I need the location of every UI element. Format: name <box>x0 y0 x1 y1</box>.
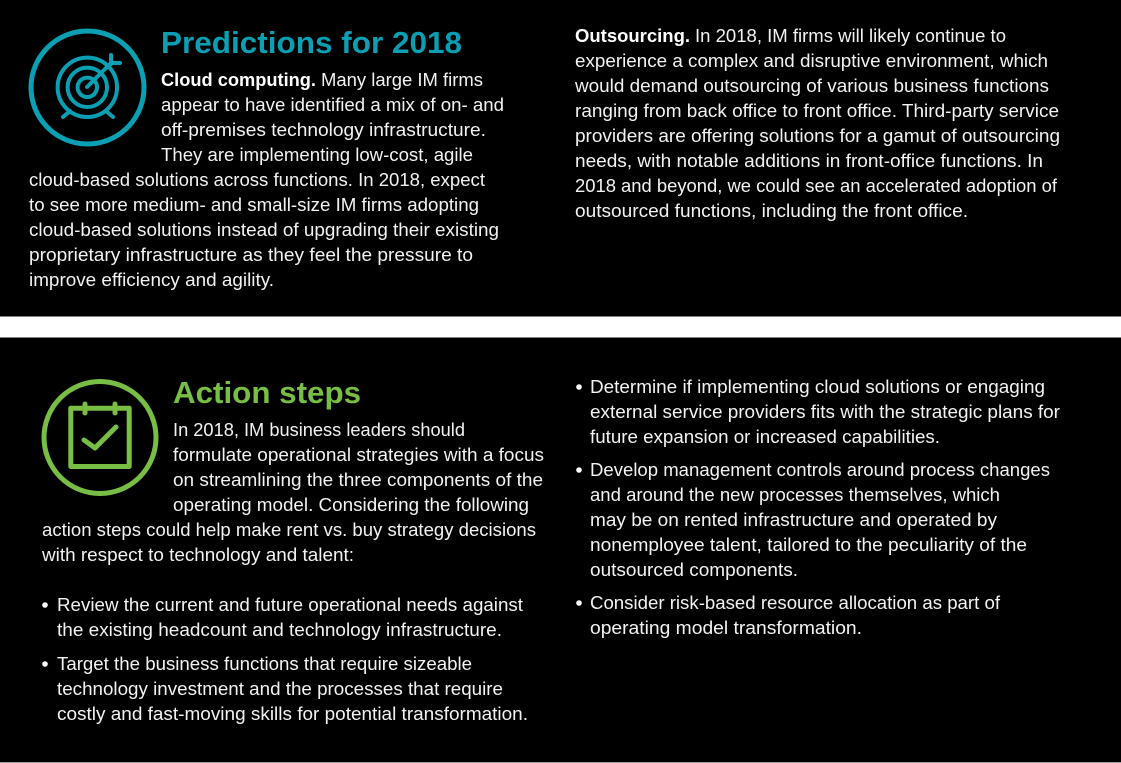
heading: predictions for 2018: Predictions for 2018 <box>161 25 462 60</box>
list: left action steps: the existing headcount and technology infrastructure. <box>57 619 502 640</box>
text block: action steps intro: action steps could help make rent vs. buy strategy decisions <box>42 519 536 540</box>
list: right action steps: operating model transformation. <box>590 617 862 638</box>
list: right action steps: external service providers fits with the strategic plans for <box>590 401 1060 422</box>
text block: action steps intro: operating model. Considering the following <box>173 494 529 515</box>
text block: cloud computing: appear to have identified a mix of on- and <box>161 94 504 115</box>
list: right action steps: may be on rented infrastructure and operated by <box>590 509 998 530</box>
text block: outsourcing: providers are offering solutions for a gamut of outsourcing <box>575 125 1060 146</box>
text block: cloud computing: Cloud computing. <box>161 69 316 90</box>
text block: action steps intro <box>41 419 544 565</box>
text block: cloud computing <box>29 69 504 290</box>
list: right action steps: and around the new processes themselves, which <box>590 484 1000 505</box>
text block: outsourcing: needs, with notable additions in front-office functions. In <box>575 150 1043 171</box>
text block: action steps intro: In 2018, IM business leaders should <box>173 419 465 440</box>
text block: action steps intro: on streamlining the three components of the <box>173 469 543 490</box>
list: left action steps: Target the business functions that require sizeable <box>57 653 472 674</box>
text block: outsourcing: 2018 and beyond, we could see an accelerated adoption of <box>575 175 1058 196</box>
list: right action steps: Consider risk-based resource allocation as part of <box>590 592 1001 613</box>
text block: cloud computing: cloud-based solutions across functions. In 2018, expect <box>29 169 485 190</box>
panel: predictions for 2018 <box>0 0 1121 316</box>
list: right action steps: Develop management controls around process changes <box>590 459 1050 480</box>
list: right action steps: Determine if implementing cloud solutions or engaging <box>590 376 1045 397</box>
list: right action steps: future expansion or increased capabilities. <box>590 426 940 447</box>
text block: outsourcing: outsourced functions, including the front office. <box>575 200 968 221</box>
list: right action steps: nonemployee talent, tailored to the peculiarity of the <box>590 534 1027 555</box>
text block: cloud computing: improve efficiency and agility. <box>29 269 274 290</box>
list: left action steps: Review the current and future operational needs against <box>57 594 523 615</box>
list: left action steps: costly and fast-moving skills for potential transformation. <box>57 703 528 724</box>
heading: action steps: Action steps <box>173 375 361 410</box>
text block: outsourcing: would demand outsourcing of various business functions <box>574 75 1049 96</box>
text block: cloud computing: cloud-based solutions instead of upgrading their existing <box>29 219 499 240</box>
text block: outsourcing: experience a complex and disruptive environment, which <box>575 50 1048 71</box>
text block: action steps intro: formulate operational strategies with a focus <box>173 444 544 465</box>
text block: outsourcing: Outsourcing. <box>575 25 690 46</box>
list: right action steps <box>576 376 1060 638</box>
icon: target with arrow <box>31 31 144 144</box>
text block: cloud computing: Many large IM firms <box>321 69 483 90</box>
text block: action steps intro: with respect to technology and talent: <box>41 544 354 565</box>
panel: action steps <box>0 338 1121 762</box>
icon: calendar with check mark <box>44 382 156 494</box>
text block: cloud computing: They are implementing low-cost, agile <box>161 144 473 165</box>
list: right action steps: outsourced components. <box>590 559 798 580</box>
text block: cloud computing: proprietary infrastructure as they feel the pressure to <box>29 244 473 265</box>
text block: outsourcing: ranging from back office to front office. Third-party service <box>575 100 1059 121</box>
text block: outsourcing <box>574 25 1060 221</box>
text block: outsourcing: In 2018, IM firms will likely continue to <box>695 25 1006 46</box>
text block: cloud computing: to see more medium- and small-size IM firms adopting <box>29 194 479 215</box>
list: left action steps: technology investment and the processes that require <box>57 678 503 699</box>
list: left action steps <box>42 594 528 724</box>
text block: cloud computing: off-premises technology infrastructure. <box>161 119 486 140</box>
